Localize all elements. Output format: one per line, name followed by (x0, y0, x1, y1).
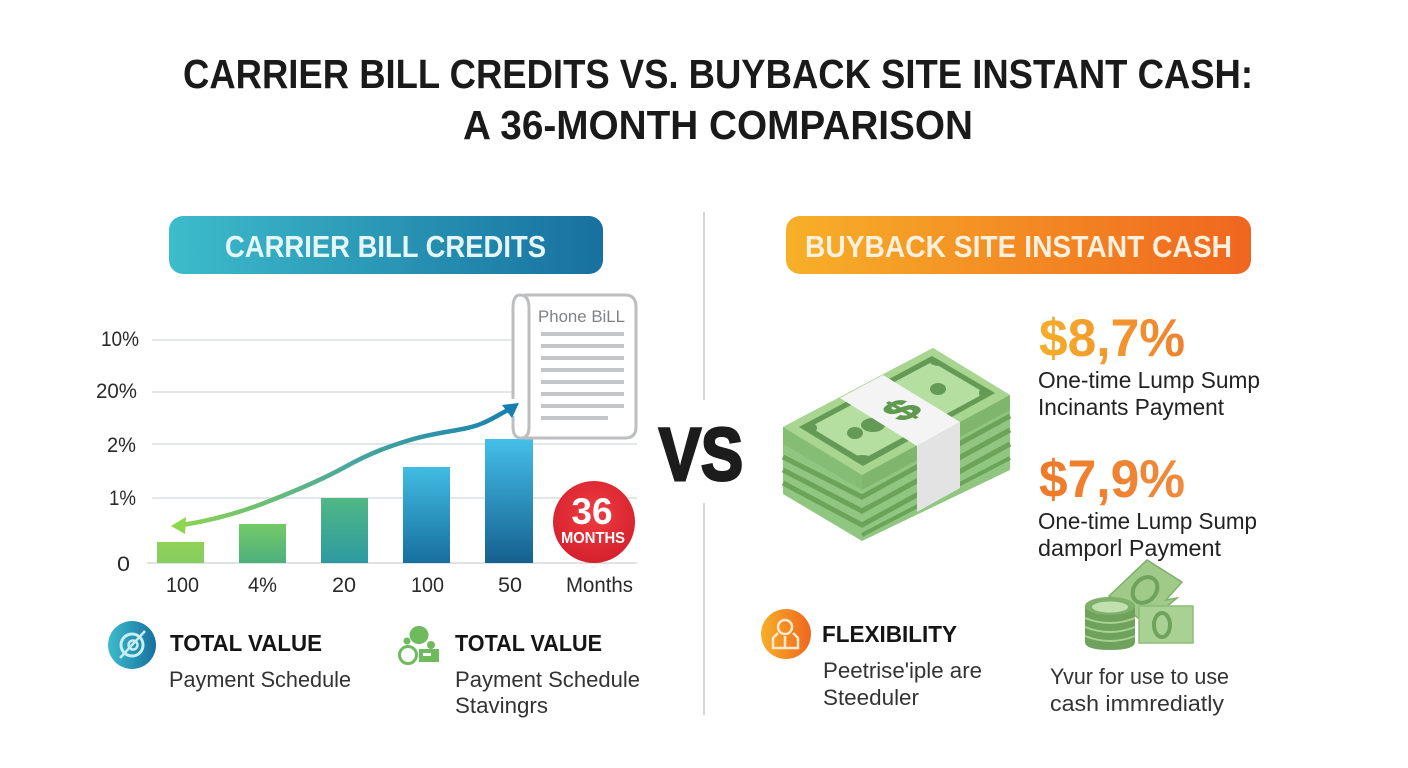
badge: 36 months (553, 481, 635, 563)
y axis labels: 1% (109, 487, 136, 510)
heading: buyback site instant cash: BUYBACK SITE INSTANT CASH (805, 229, 1232, 264)
icon: people savings (400, 626, 439, 664)
left stat: total value (108, 621, 351, 692)
x axis labels: 20 (332, 574, 356, 597)
middle stat: total value savings: Payment Schedule (455, 667, 640, 692)
flexibility stat: Peetrise'iple are (823, 658, 982, 683)
x axis labels: 100 (166, 574, 199, 597)
cash use stat: Yvur for use to use (1050, 664, 1229, 689)
title: CARRIER BILL CREDITS VS. BUYBACK SITE INSTANT CASH: (183, 51, 1253, 97)
icon: target (108, 621, 156, 669)
arrow: growth trend (171, 403, 519, 534)
x axis labels (166, 574, 633, 597)
middle stat: total value savings: TOTAL VALUE (455, 630, 602, 656)
left stat: total value: TOTAL VALUE (170, 630, 322, 656)
title: A 36-MONTH COMPARISON (463, 102, 973, 148)
y axis labels: 0 (117, 553, 130, 576)
x axis labels: 4% (248, 574, 277, 597)
stat: 8.7 percent: Incinants Payment (1038, 394, 1225, 420)
icon: flexibility (761, 609, 811, 659)
stat: 7.9 percent: damporl Payment (1038, 535, 1222, 561)
y axis labels: 2% (107, 434, 136, 457)
heading: buyback site instant cash (786, 216, 1251, 274)
stat: 8.7 percent (1038, 309, 1260, 420)
cash use stat: cash immrediatly (1050, 691, 1224, 716)
stat: 7.9 percent: One-time Lump Sump (1038, 508, 1257, 534)
middle stat: total value savings (400, 626, 640, 718)
badge: 36 months: MONTHS (561, 530, 625, 547)
bar chart: carrier credits (96, 328, 637, 597)
badge: 36 months: 36 (571, 491, 613, 532)
icon: phone bill: Phone BiLL (538, 307, 625, 326)
cash use stat (1050, 560, 1229, 716)
icon: stack of cash (783, 348, 1010, 541)
stat: 8.7 percent: $8,7% (1039, 309, 1185, 368)
y axis labels: 20% (96, 380, 137, 403)
left stat: total value: Payment Schedule (169, 667, 351, 692)
flexibility stat (761, 609, 982, 710)
stat: 7.9 percent: $7,9% (1039, 450, 1185, 509)
band dollar sign: $ (872, 393, 933, 427)
middle stat: total value savings: Stavingrs (455, 693, 548, 718)
x axis labels: 100 (411, 574, 444, 597)
heading: carrier bill credits (169, 216, 603, 274)
stat: 8.7 percent: One-time Lump Sump (1038, 367, 1260, 393)
vs label: VS (659, 413, 743, 496)
x axis labels: 50 (498, 574, 522, 597)
icon: phone bill (513, 295, 636, 438)
bars (157, 439, 533, 563)
flexibility stat: FLEXIBILITY (822, 621, 957, 647)
stat: 7.9 percent (1038, 450, 1257, 561)
flexibility stat: Steeduler (823, 685, 919, 710)
title (183, 51, 1253, 148)
icon: coins and notes (1085, 560, 1193, 650)
heading: carrier bill credits: CARRIER BILL CREDITS (225, 229, 546, 264)
infographic canvas (97, 60, 1260, 718)
y axis labels: 10% (101, 328, 139, 351)
x axis labels: Months (566, 574, 633, 597)
y axis labels (96, 328, 139, 576)
